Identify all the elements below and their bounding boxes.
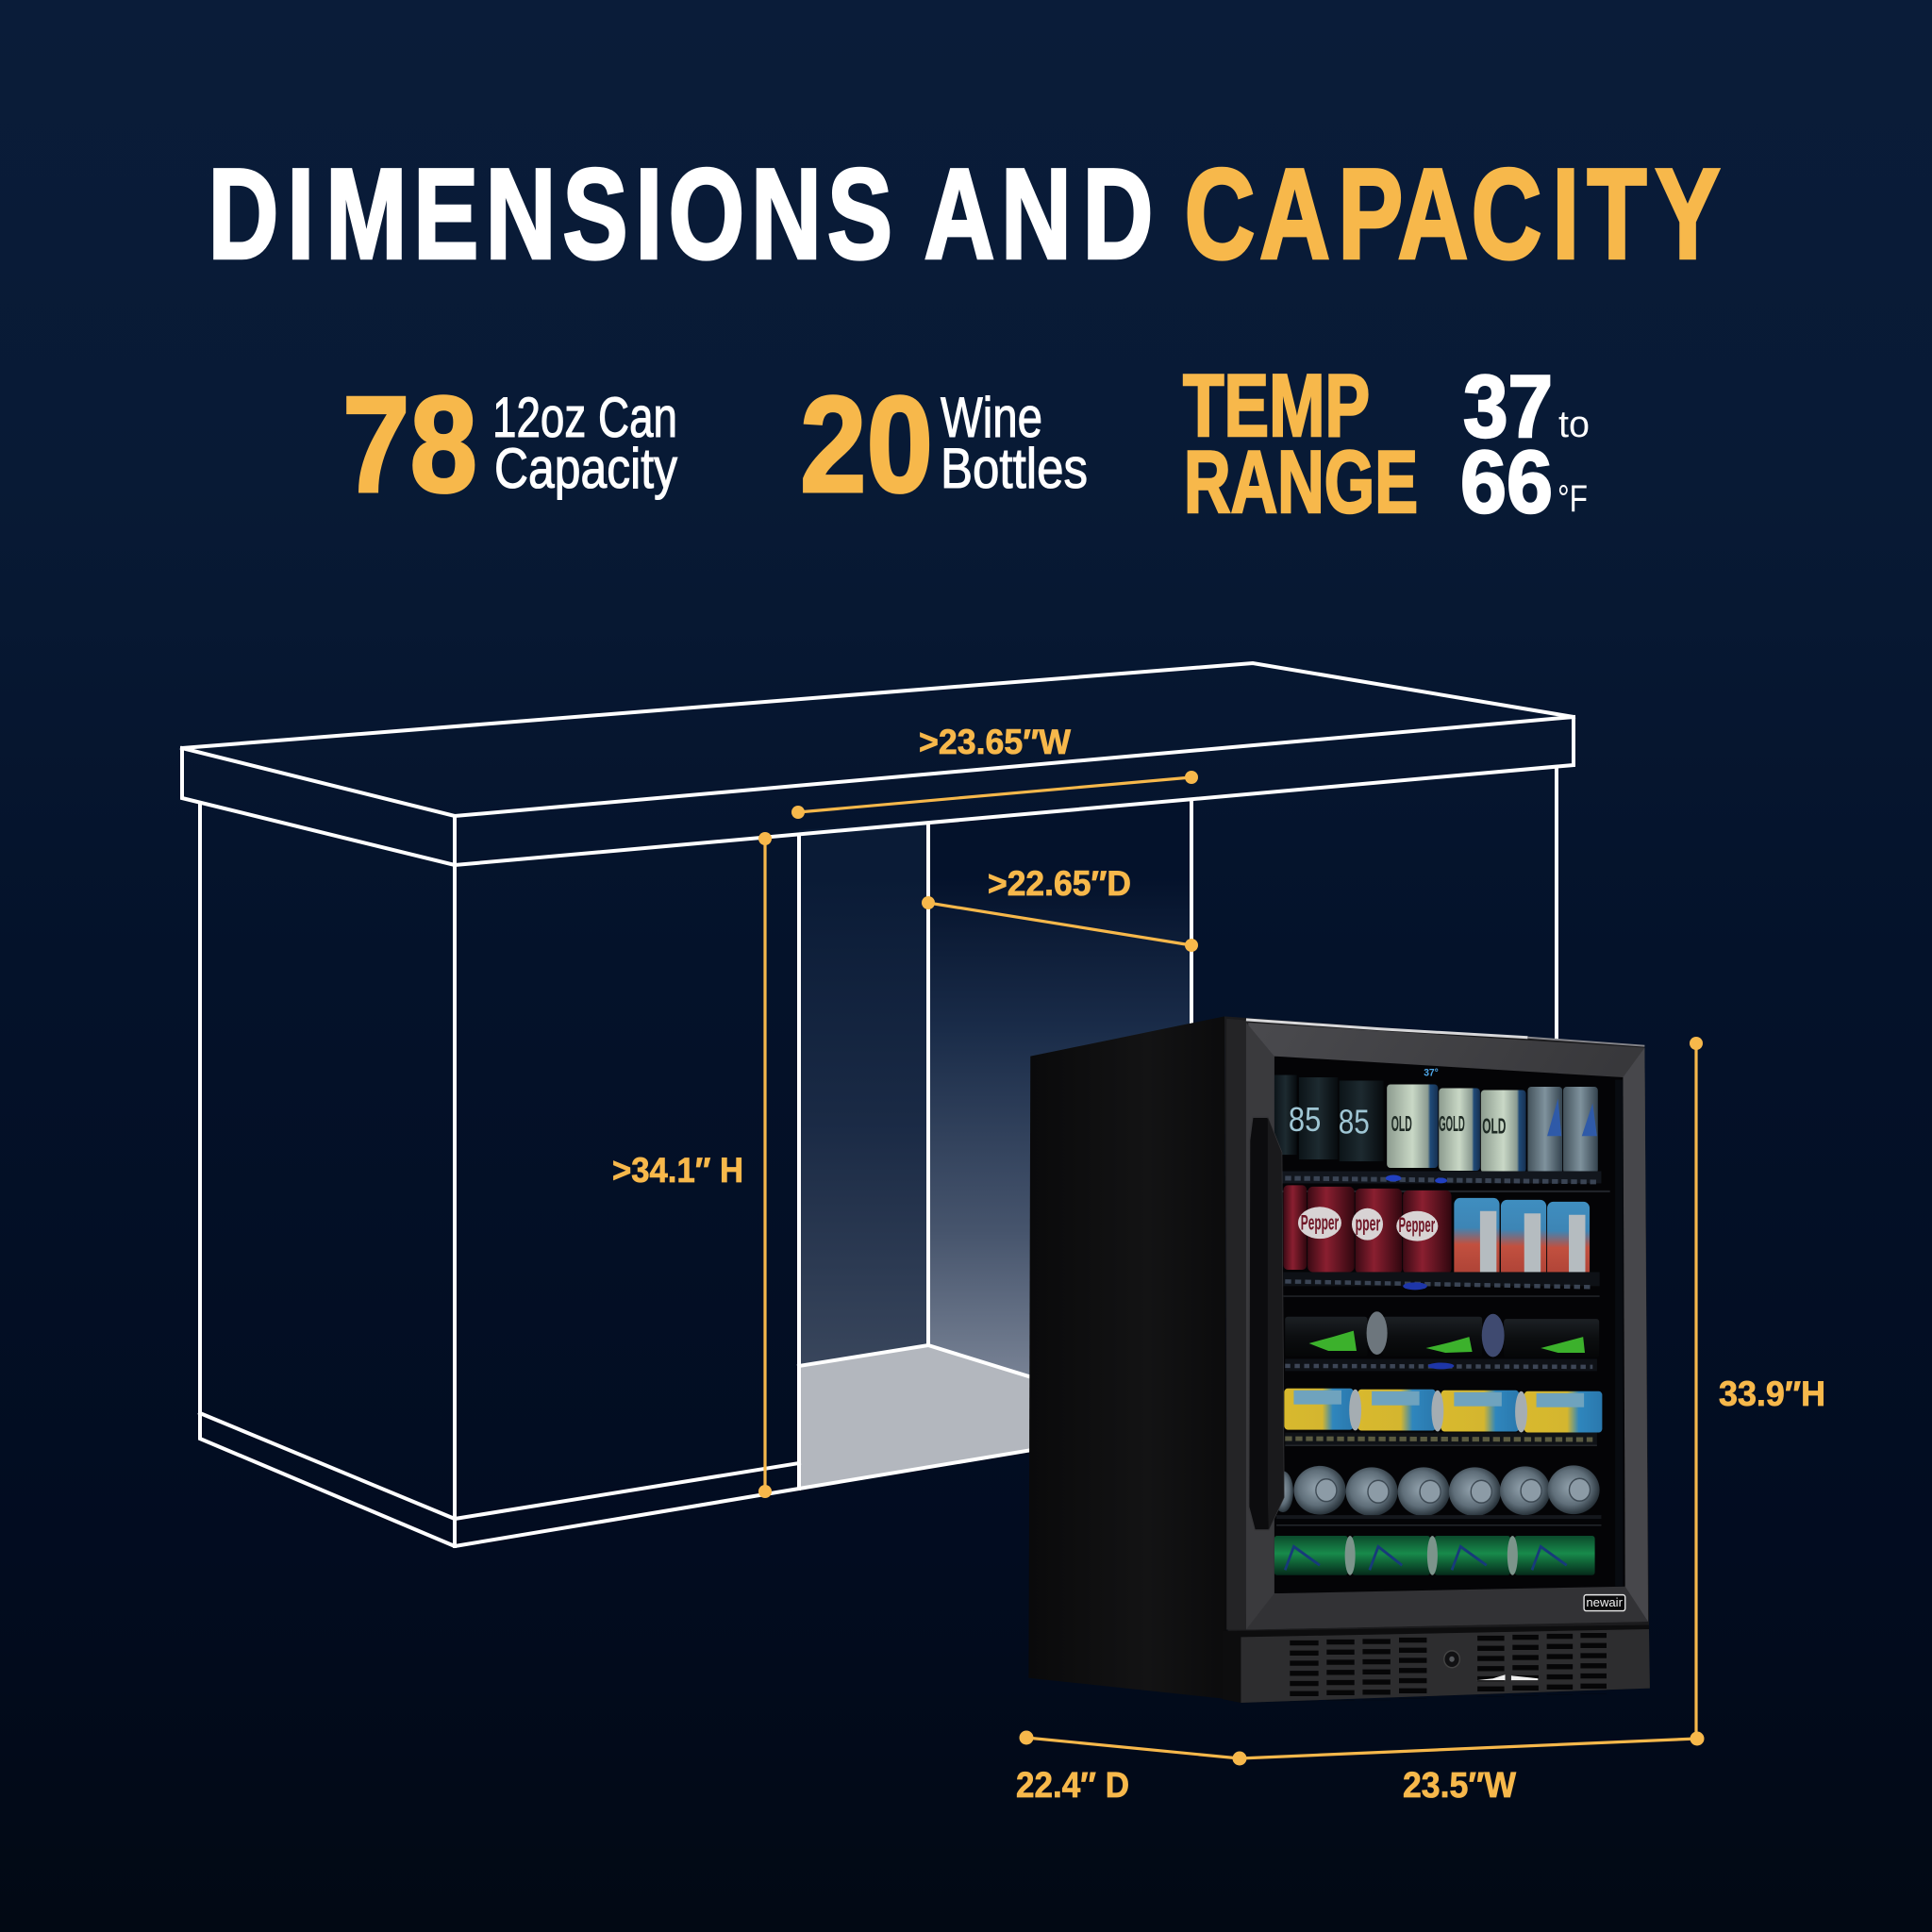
title xyxy=(208,142,1720,286)
dimension: fridge height: 33.9″H xyxy=(1719,1374,1825,1413)
shelf 4: yellow and blue cans xyxy=(1284,1389,1602,1433)
title: CAPACITY xyxy=(1185,142,1720,286)
stat: can capacity xyxy=(342,368,677,521)
stat: temperature range: 37 xyxy=(1463,357,1553,456)
stat: can capacity: 12oz Can xyxy=(492,386,677,449)
temperature display: 37° xyxy=(1424,1067,1439,1079)
beverage fridge xyxy=(1028,1016,1650,1703)
shelf 1: dark and pale cans: 85 xyxy=(1339,1105,1370,1141)
shelf 2: red and blue cans: Pepper xyxy=(1301,1212,1339,1235)
shelf rail 2 xyxy=(1283,1272,1600,1297)
shelf rail 3 xyxy=(1285,1358,1597,1371)
brand badge: newair xyxy=(1586,1596,1623,1609)
dimension: cabinet depth: >22.65″D xyxy=(988,864,1131,903)
fridge side panel xyxy=(1028,1016,1228,1699)
shelf 1: dark and pale cans: GOLD xyxy=(1439,1111,1465,1136)
dimension: fridge depth xyxy=(1016,1730,1247,1806)
shelf rail 5 xyxy=(1276,1515,1601,1526)
dimension: fridge depth: 22.4″ D xyxy=(1016,1766,1129,1806)
right glass edge strip xyxy=(1615,1080,1623,1587)
stat: wine bottles: 20 xyxy=(800,368,933,521)
dimension: fridge width xyxy=(1240,1732,1704,1806)
dimension: fridge height xyxy=(1690,1037,1825,1739)
cabinet wireframe xyxy=(182,663,1574,1546)
shelf 5: can tops xyxy=(1273,1465,1600,1516)
dimension: cabinet depth xyxy=(922,864,1198,952)
brand badge xyxy=(1584,1595,1625,1611)
dimension: cabinet width: >23.65″W xyxy=(919,723,1071,761)
shelf 1: dark and pale cans: OLD xyxy=(1482,1114,1506,1139)
fridge glass and interior xyxy=(1272,1054,1627,1593)
dimension: cabinet width xyxy=(791,723,1198,819)
stat: wine bottles: Bottles xyxy=(941,437,1088,500)
shelf 2: red and blue cans: pper xyxy=(1356,1213,1380,1236)
stat: can capacity: Capacity xyxy=(494,437,677,500)
stat: can capacity: 78 xyxy=(342,368,477,521)
shelf rail 4 xyxy=(1285,1433,1597,1446)
shelf 2: red and blue cans: Pepper xyxy=(1399,1214,1435,1237)
cabinet alcove: illuminated opening xyxy=(799,800,1191,1489)
fridge door frame xyxy=(1224,1016,1649,1631)
shelf 2: red and blue cans xyxy=(1283,1185,1591,1272)
stat: temperature range xyxy=(1183,356,1590,531)
shelf 1: dark and pale cans: 85 xyxy=(1289,1102,1321,1140)
title: DIMENSIONS AND xyxy=(208,142,1153,286)
fridge base grille xyxy=(1223,1624,1650,1703)
dimension: cabinet height xyxy=(612,832,772,1498)
stat: wine bottles: Wine xyxy=(941,386,1042,449)
shelf 6: green cans xyxy=(1274,1536,1595,1575)
stat: temperature range: TEMP xyxy=(1183,356,1370,455)
shelf 1: dark and pale cans: OLD xyxy=(1391,1111,1412,1136)
dimension: cabinet height: >34.1″ H xyxy=(612,1151,743,1190)
stat: temperature range: °F xyxy=(1557,478,1588,520)
shelf 3: black cans with green marks xyxy=(1285,1311,1599,1357)
stat: temperature range: 66 xyxy=(1460,432,1553,531)
stat: temperature range: to xyxy=(1558,404,1590,445)
dimension: fridge width: 23.5″W xyxy=(1403,1766,1516,1806)
stat: temperature range: RANGE xyxy=(1184,432,1418,531)
door handle xyxy=(1249,1117,1284,1530)
shelf rail 1 xyxy=(1281,1171,1610,1192)
shelf 1: dark and pale cans xyxy=(1274,1075,1598,1174)
stat: wine bottles xyxy=(800,368,1088,521)
